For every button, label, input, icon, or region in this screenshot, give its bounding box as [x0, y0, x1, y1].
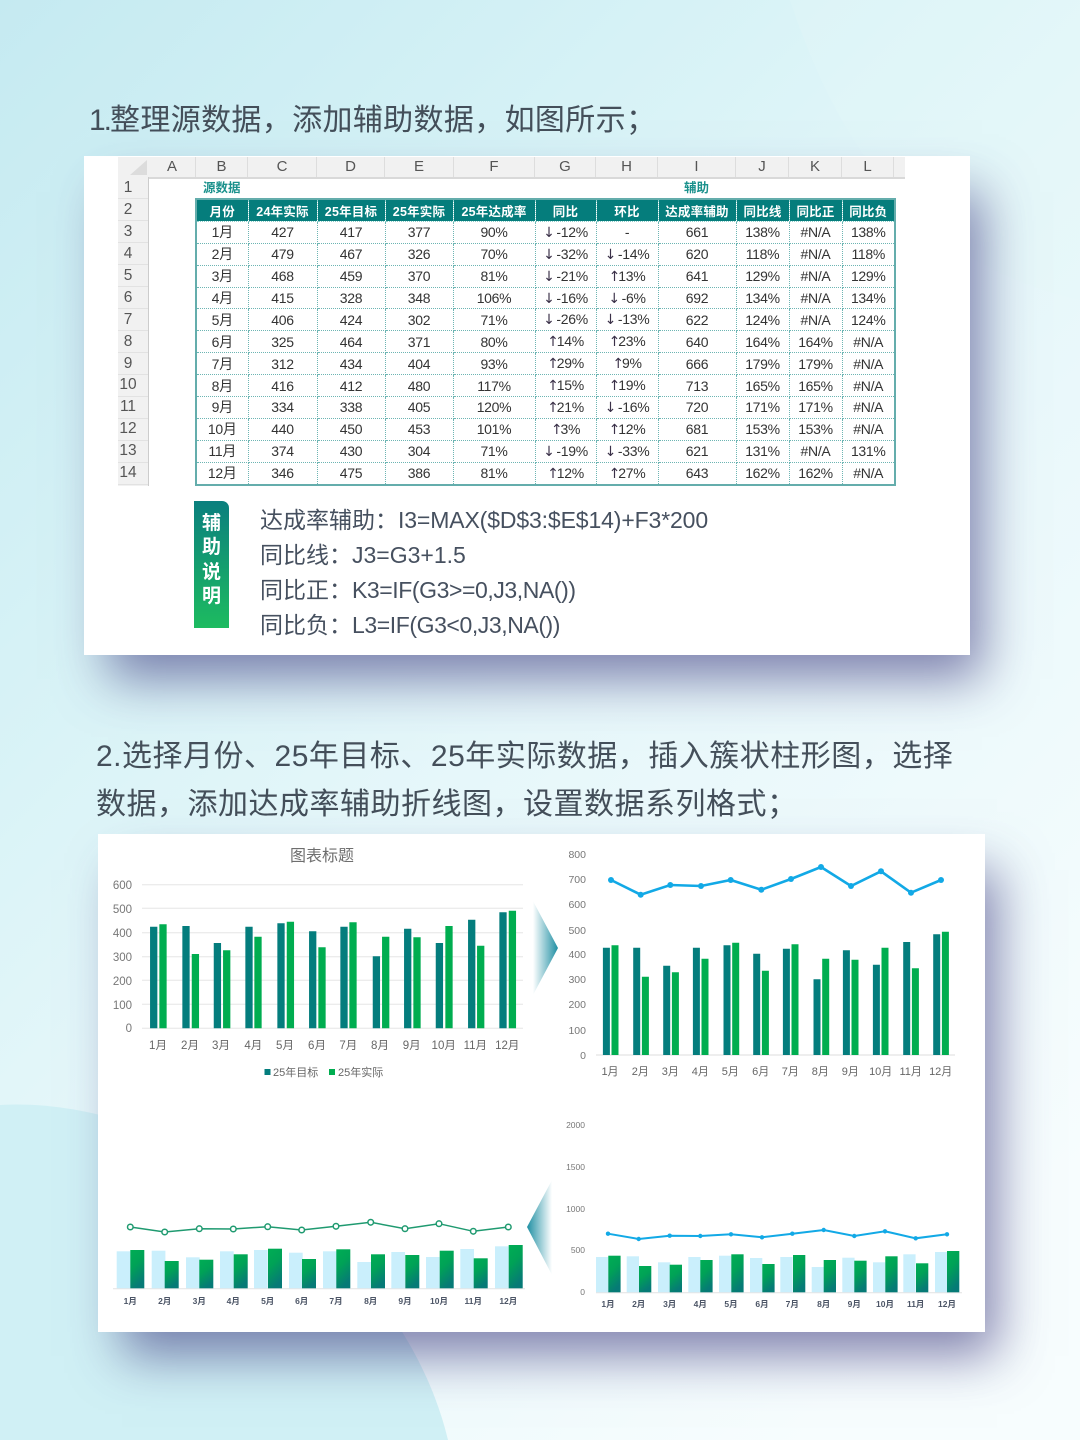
data table: 434 — [340, 356, 362, 372]
x axis labels: 4月 — [692, 1066, 709, 1078]
data table: ↑9% — [612, 355, 642, 372]
x axis labels: 4月 — [227, 1296, 240, 1306]
data table — [195, 198, 896, 486]
row header column: 11 — [120, 398, 136, 415]
data table: 8月 — [212, 378, 233, 394]
y axis labels: 100 — [113, 1000, 132, 1012]
row header column: 3 — [124, 223, 132, 240]
data table: 117% — [477, 378, 511, 394]
data table: #N/A — [801, 268, 830, 284]
data table: 304 — [408, 443, 430, 459]
data table: 370 — [408, 268, 430, 284]
data table: ↑21% — [547, 399, 584, 416]
x axis labels: 7月 — [782, 1066, 799, 1078]
data table: 月份 — [210, 205, 235, 219]
data table: #N/A — [853, 399, 883, 415]
arrow: step to right — [533, 901, 558, 995]
x axis labels: 7月 — [339, 1040, 357, 1052]
data table: 106% — [477, 290, 511, 306]
x axis labels: 12月 — [495, 1040, 519, 1052]
y axis labels: 800 — [568, 849, 586, 861]
data table: #N/A — [801, 224, 830, 240]
x axis labels: 9月 — [842, 1066, 859, 1078]
data table: 424 — [340, 312, 362, 328]
data table: 165% — [745, 378, 780, 394]
data table: ↓ -13% — [605, 311, 649, 328]
x axis labels: 11月 — [907, 1299, 924, 1309]
data table: 164% — [798, 334, 833, 350]
data table: 12月 — [208, 465, 237, 481]
tag: helper notes: 辅 — [202, 513, 221, 534]
data table: 131% — [745, 443, 780, 459]
data table: 164% — [745, 334, 780, 350]
data table: 661 — [686, 224, 708, 240]
bars: gradient series — [130, 1245, 523, 1288]
y axis labels — [113, 880, 132, 1035]
line: achievement helper — [606, 1228, 949, 1241]
data table: 171% — [798, 399, 833, 415]
x axis labels — [124, 1296, 517, 1306]
data table: 302 — [408, 312, 430, 328]
data table: 162% — [745, 465, 780, 481]
y axis labels: 600 — [113, 880, 132, 892]
tag: helper notes: 助 — [202, 537, 221, 558]
x axis labels: 7月 — [786, 1299, 799, 1309]
x axis labels: 7月 — [329, 1296, 343, 1306]
column header bar: D — [345, 158, 356, 175]
data table: 459 — [340, 268, 362, 284]
data table: 124% — [851, 312, 886, 328]
data table: 同比 — [553, 205, 578, 219]
data table: 24年实际 — [256, 205, 309, 219]
column header bar — [118, 157, 905, 179]
data table: 138% — [745, 224, 780, 240]
data table: 440 — [271, 421, 294, 437]
data table: #N/A — [853, 465, 883, 481]
y axis labels: 0 — [580, 1050, 586, 1062]
chart title: 图表标题 — [290, 847, 354, 865]
x axis labels: 2月 — [158, 1296, 171, 1306]
row header column — [118, 177, 149, 486]
x axis labels — [149, 1040, 519, 1052]
heading: step 1: 1.整理源数据，添加辅助数据，如图所示； — [89, 104, 656, 137]
data table: 3月 — [212, 268, 233, 284]
data table: 11月 — [208, 443, 236, 459]
row header column: 12 — [119, 420, 137, 437]
legend — [264, 1065, 383, 1079]
data table: 70% — [480, 246, 508, 262]
x axis labels: 8月 — [371, 1040, 389, 1052]
x axis labels: 2月 — [632, 1299, 645, 1309]
data table: ↑12% — [547, 465, 584, 482]
heading: step 2 — [96, 740, 953, 821]
legend: 25年实际 — [338, 1065, 383, 1079]
x axis labels: 1月 — [601, 1299, 615, 1309]
x axis labels: 8月 — [812, 1066, 829, 1078]
data table: ↓ -16% — [605, 399, 649, 416]
y axis labels: 500 — [113, 904, 132, 916]
chart: clustered column — [113, 847, 523, 1079]
y axis labels: 400 — [568, 949, 586, 961]
data table: ↓ -32% — [543, 246, 588, 263]
data table: 334 — [271, 399, 294, 415]
data table: ↓ -26% — [543, 311, 588, 328]
x axis labels: 12月 — [929, 1066, 952, 1078]
data table: 153% — [798, 421, 833, 437]
x axis labels: 6月 — [308, 1040, 326, 1052]
data table: 153% — [745, 421, 780, 437]
data table: 643 — [686, 465, 708, 481]
data table: ↑12% — [609, 421, 645, 438]
formula: yoy negative: 同比负：L3=IF(G3<0,J3,NA()) — [260, 612, 560, 638]
data table: ↑23% — [609, 333, 645, 350]
data table: 417 — [340, 224, 362, 240]
row header column: 7 — [124, 311, 132, 328]
bars: 25 actual — [615, 932, 945, 1055]
select-all triangle — [130, 160, 147, 175]
data table: 681 — [686, 421, 708, 437]
y axis labels: 700 — [568, 874, 586, 886]
column header bar: H — [621, 158, 632, 175]
data table: 325 — [271, 334, 294, 350]
row header column: 8 — [124, 333, 132, 350]
x axis labels: 6月 — [752, 1066, 769, 1078]
data table: #N/A — [801, 443, 830, 459]
x axis labels: 9月 — [848, 1299, 861, 1309]
data table: 338 — [340, 399, 362, 415]
x axis labels: 9月 — [403, 1040, 421, 1052]
data table: #N/A — [801, 312, 830, 328]
data table: 346 — [271, 465, 294, 481]
data table: 101% — [477, 421, 511, 437]
line: achievement helper — [128, 1220, 511, 1235]
data table: 179% — [798, 356, 833, 372]
x axis labels: 1月 — [124, 1296, 137, 1306]
row header column: 9 — [124, 355, 132, 372]
data table: 5月 — [212, 312, 233, 328]
tag: helper notes — [194, 501, 229, 628]
column header bar: B — [216, 158, 226, 175]
data table: 453 — [408, 421, 430, 437]
data table: #N/A — [853, 356, 883, 372]
data table: 467 — [340, 246, 362, 262]
y axis labels — [566, 1120, 585, 1297]
data table: 179% — [745, 356, 780, 372]
bars: 25 target — [606, 934, 937, 1055]
line: achievement helper — [608, 864, 944, 898]
data table: 同比负 — [849, 205, 887, 219]
data table: 430 — [340, 443, 362, 459]
data table: 129% — [851, 268, 886, 284]
data table: #N/A — [801, 246, 830, 262]
data table: 71% — [480, 312, 508, 328]
data table: 622 — [686, 312, 708, 328]
x axis labels: 10月 — [430, 1296, 448, 1306]
data table: ↓ -14% — [605, 246, 649, 263]
data table: 25年达成率 — [461, 205, 527, 219]
data table: 713 — [686, 378, 708, 394]
y axis labels: 0 — [126, 1023, 132, 1035]
data table: 6月 — [212, 334, 233, 350]
x axis labels: 8月 — [364, 1296, 377, 1306]
x axis labels: 6月 — [295, 1296, 308, 1306]
data table: 412 — [340, 378, 362, 394]
data table: ↓ -21% — [543, 268, 588, 285]
data table: 692 — [686, 290, 708, 306]
data table: 同比正 — [796, 205, 835, 219]
tag: helper notes: 明 — [202, 586, 221, 607]
data table: 406 — [271, 312, 294, 328]
data table: ↓ -16% — [543, 290, 588, 306]
data table: 620 — [686, 246, 708, 262]
x axis labels: 1月 — [149, 1040, 167, 1052]
data table: 118% — [851, 246, 885, 262]
data table: ↑29% — [547, 355, 584, 372]
data table: - — [625, 224, 629, 240]
x axis labels: 5月 — [261, 1296, 274, 1306]
spreadsheet — [118, 157, 905, 486]
formula: yoy line: 同比线：J3=G3+1.5 — [260, 542, 466, 568]
y axis labels: 300 — [113, 952, 132, 964]
x axis labels: 5月 — [276, 1040, 294, 1052]
data table: 9月 — [212, 399, 233, 415]
data table: ↑27% — [609, 465, 645, 482]
data table: 7月 — [212, 356, 233, 372]
x axis labels — [601, 1066, 952, 1078]
data table: 90% — [480, 224, 508, 240]
data table: 450 — [340, 421, 362, 437]
data table: ↑19% — [609, 377, 645, 394]
data table: 165% — [798, 378, 833, 394]
data table: 环比 — [614, 205, 640, 219]
x axis labels: 4月 — [244, 1040, 262, 1052]
column header bar: F — [489, 158, 499, 175]
data table: 480 — [408, 378, 430, 394]
y axis labels: 300 — [568, 974, 586, 986]
x axis labels: 5月 — [722, 1066, 739, 1078]
data table: 377 — [408, 224, 430, 240]
arrow: step to left — [527, 1180, 552, 1275]
data table: 666 — [686, 356, 708, 372]
column header bar: L — [863, 158, 872, 175]
data table: 641 — [686, 268, 708, 284]
x axis labels: 9月 — [398, 1296, 412, 1306]
data table: 80% — [480, 334, 508, 350]
tag: helper notes: 说 — [202, 562, 221, 583]
x axis labels: 6月 — [755, 1299, 769, 1309]
column header bar: K — [810, 158, 820, 175]
row header column: 2 — [124, 201, 132, 218]
x axis labels: 3月 — [193, 1296, 206, 1306]
data table: ↓ -6% — [608, 290, 646, 306]
data table: 71% — [480, 443, 508, 459]
data table: 348 — [408, 290, 430, 306]
data table: #N/A — [853, 334, 883, 350]
chart: final combo — [113, 1220, 525, 1306]
x axis labels: 11月 — [464, 1040, 487, 1052]
x axis labels: 4月 — [694, 1299, 707, 1309]
x axis labels: 3月 — [212, 1040, 230, 1052]
data table: ↑14% — [547, 333, 584, 350]
x axis labels: 10月 — [432, 1040, 456, 1052]
bars: pale series — [117, 1246, 509, 1288]
data table: 81% — [480, 268, 508, 284]
chart: columns with line — [568, 849, 955, 1078]
data table: 374 — [271, 443, 294, 459]
data table: 312 — [271, 356, 294, 372]
data table: 405 — [408, 399, 430, 415]
data table: 416 — [271, 378, 294, 394]
bars: gradient series — [608, 1251, 959, 1292]
chart: axis adjusted columns with line — [566, 1120, 962, 1309]
data table: 124% — [745, 312, 780, 328]
y axis labels: 500 — [571, 1245, 585, 1255]
data table: ↑15% — [547, 377, 584, 394]
data table: 10月 — [208, 421, 237, 437]
x axis labels: 8月 — [817, 1299, 830, 1309]
heading: step 2: 数据，添加达成率辅助折线图，设置数据系列格式； — [96, 788, 798, 821]
data table: 134% — [851, 290, 886, 306]
row header column: 1 — [124, 179, 132, 196]
label: source data: 源数据 — [203, 181, 241, 195]
data table: 93% — [480, 356, 508, 372]
data table: 同比线 — [743, 205, 782, 219]
panel: chart steps — [98, 834, 985, 1332]
data table: 1月 — [212, 224, 233, 240]
row header column: 10 — [119, 376, 137, 393]
column header bar: A — [167, 158, 177, 175]
y axis labels: 1000 — [566, 1204, 585, 1214]
bars: 25 actual — [163, 911, 512, 1028]
x axis labels: 10月 — [876, 1299, 894, 1309]
y axis labels: 500 — [568, 925, 586, 937]
row header column: 6 — [124, 289, 132, 306]
data table: 640 — [686, 334, 708, 350]
data table: 2月 — [212, 246, 233, 262]
data table: ↑3% — [551, 421, 580, 438]
data table: 328 — [340, 290, 362, 306]
data table: 134% — [745, 290, 780, 306]
row header column: 13 — [119, 442, 137, 459]
data table: 120% — [477, 399, 511, 415]
data table: 479 — [271, 246, 294, 262]
data table: 427 — [271, 224, 294, 240]
bars: 25 target — [154, 912, 503, 1028]
formula: achievement helper: 达成率辅助：I3=MAX($D$3:$E$14)+F3*200 — [260, 507, 708, 533]
x axis labels: 2月 — [181, 1040, 199, 1052]
data table: 475 — [340, 465, 362, 481]
data table: 464 — [340, 334, 362, 350]
data table: 138% — [851, 224, 886, 240]
y axis labels: 0 — [580, 1287, 585, 1297]
data table: #N/A — [853, 378, 883, 394]
data table: 25年实际 — [393, 205, 445, 219]
column header bar: J — [758, 158, 766, 175]
data table: ↓ -19% — [543, 443, 588, 460]
label: helper data: 辅助 — [684, 181, 709, 195]
x axis labels: 12月 — [938, 1299, 956, 1309]
data table: ↑13% — [609, 268, 645, 285]
y axis labels: 200 — [568, 999, 586, 1011]
data table: 162% — [798, 465, 833, 481]
data table: 621 — [686, 443, 708, 459]
x axis labels: 2月 — [632, 1066, 649, 1078]
data table: 468 — [271, 268, 294, 284]
x axis labels: 11月 — [465, 1296, 482, 1306]
data table: 386 — [408, 465, 430, 481]
data table: 415 — [271, 290, 294, 306]
data table: #N/A — [801, 290, 830, 306]
x axis labels — [601, 1299, 956, 1309]
bars: pale series — [596, 1252, 947, 1292]
y axis labels: 200 — [113, 976, 132, 988]
data table: 720 — [686, 399, 708, 415]
data table: ↓ -33% — [605, 443, 649, 460]
data table: 371 — [408, 334, 430, 350]
x axis labels: 5月 — [724, 1299, 738, 1309]
data table: 131% — [851, 443, 886, 459]
y axis labels: 400 — [113, 928, 132, 940]
heading: step 2: 2.选择月份、25年目标、25年实际数据，插入簇状柱形图，选择 — [96, 740, 953, 773]
data table: 118% — [746, 246, 779, 262]
formula: yoy positive: 同比正：K3=IF(G3>=0,J3,NA()) — [260, 577, 576, 603]
x axis labels: 1月 — [601, 1066, 619, 1078]
x axis labels: 3月 — [662, 1066, 679, 1078]
data table: 129% — [745, 268, 780, 284]
data table: 25年目标 — [325, 205, 377, 219]
y axis labels: 600 — [568, 899, 586, 911]
data table: #N/A — [853, 421, 883, 437]
column header bar: E — [414, 158, 424, 175]
column header bar: G — [559, 158, 571, 175]
y axis labels — [568, 849, 586, 1062]
legend: 25年目标 — [273, 1065, 318, 1079]
x axis labels: 12月 — [499, 1296, 517, 1306]
row header column: 14 — [119, 464, 137, 481]
data table: 404 — [408, 356, 430, 372]
column header bar: I — [694, 158, 699, 175]
y axis labels: 2000 — [566, 1120, 585, 1130]
panel: source data spreadsheet — [84, 156, 970, 655]
y axis labels: 100 — [568, 1025, 586, 1037]
column header bar: C — [277, 158, 287, 175]
y axis labels: 1500 — [566, 1162, 585, 1172]
x axis labels: 11月 — [899, 1066, 922, 1078]
data table: 4月 — [212, 290, 233, 306]
data table: ↓ -12% — [543, 224, 588, 241]
data table: 达成率辅助 — [665, 205, 729, 219]
x axis labels: 3月 — [663, 1299, 676, 1309]
row header column: 4 — [124, 245, 132, 262]
x axis labels: 10月 — [869, 1066, 892, 1078]
data table: 171% — [745, 399, 780, 415]
data table: 326 — [408, 246, 430, 262]
row header column: 5 — [124, 267, 132, 284]
data table: 81% — [480, 465, 508, 481]
